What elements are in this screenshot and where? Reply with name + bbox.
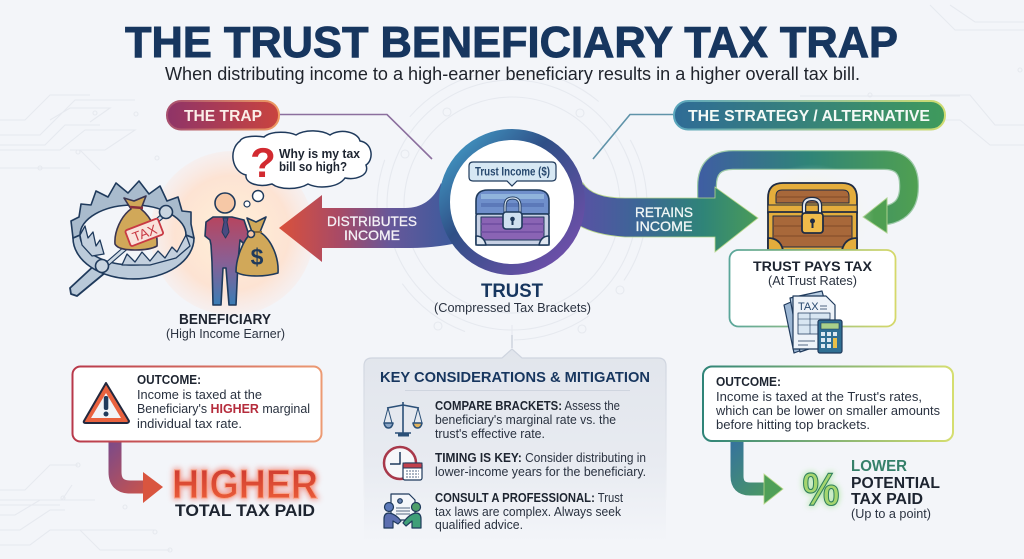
panel: left outcome: OUTCOME:: [137, 372, 201, 387]
trust pays tax box: TRUST PAYS TAX: [753, 259, 872, 274]
trust pays tax box: [730, 250, 896, 326]
lower potential tax paid: TAX PAID: [851, 491, 923, 508]
higher total tax paid: TOTAL TAX PAID: [175, 501, 315, 520]
icon: warning triangle: [84, 383, 129, 423]
pill: the strategy: [674, 101, 945, 130]
icon: bear trap with tax bag: [70, 181, 194, 296]
text: timing is key: [435, 450, 646, 479]
thought bubble: ?: [250, 139, 276, 186]
text: consult a professional: qualified advice.: [435, 517, 523, 532]
panel: key considerations: [364, 335, 666, 542]
trust label: [434, 280, 591, 315]
icon: percent sign: %: [802, 463, 840, 515]
arrow: retains income: [578, 183, 758, 252]
arrow: loop back to chest: [707, 160, 909, 233]
icon: consultation handshake: [384, 494, 421, 528]
lower potential tax paid: (Up to a point): [851, 506, 931, 521]
text: consult a professional: CONSULT A PROFESSIONAL: Trust: [435, 490, 623, 505]
arrow: distributes income: INCOME: [344, 227, 400, 243]
icon: wooden treasure chest: [768, 183, 857, 250]
arrow: distributes income: DISTRIBUTES: [327, 213, 417, 229]
text: compare brackets: COMPARE BRACKETS: Assess the: [435, 398, 620, 413]
beneficiary label: (High Income Earner): [166, 326, 285, 341]
text: consult a professional: tax laws are complex. Always seek: [435, 504, 621, 519]
higher total tax paid: HIGHER: [172, 461, 318, 507]
pill: the trap: THE TRAP: [184, 108, 262, 125]
trust label: (Compressed Tax Brackets): [434, 300, 591, 315]
subtitle: When distributing income to a high-earner beneficiary results in a higher overall tax bill.: [165, 63, 860, 84]
trust label: TRUST: [481, 280, 543, 302]
panel: right outcome: before hitting top brackets.: [716, 417, 870, 432]
trust income label: Trust Income ($): [475, 166, 550, 178]
thought bubble: bill so high?: [279, 160, 347, 174]
text: compare brackets: trust's effective rate.: [435, 426, 545, 441]
connector: strategy pill to trust: [593, 114, 673, 159]
higher total tax paid: HIGHER: [172, 461, 318, 507]
beneficiary glow: [150, 151, 314, 315]
arrow: to higher tax: [115, 442, 163, 503]
text: consult a professional: [435, 490, 623, 532]
panel: left outcome: individual tax rate.: [137, 416, 242, 431]
trust pays tax box: (At Trust Rates): [768, 274, 857, 288]
panel: right outcome: which can be lower on smaller amounts: [715, 403, 940, 418]
icon: beneficiary person with money bag: [205, 193, 278, 305]
arrow: distributes income: [279, 183, 470, 262]
lower potential tax paid: LOWER: [851, 458, 907, 475]
icon: percent sign: %: [802, 463, 840, 515]
arrow: retains income: RETAINS: [635, 204, 693, 220]
money bag: $: [251, 244, 264, 270]
panel: right outcome: OUTCOME:: [716, 374, 781, 389]
trust circle: [444, 134, 580, 270]
title: THE TRUST BENEFICIARY TAX TRAP: [125, 18, 898, 67]
panel: left outcome: Income is taxed at the: [137, 387, 262, 402]
icon: tax documents and calculator: TAX: [798, 301, 819, 313]
text: compare brackets: [435, 398, 620, 441]
pill: the trap: [167, 101, 279, 130]
pill: the strategy: THE STRATEGY / ALTERNATIVE: [688, 108, 930, 125]
lower potential tax paid: [851, 458, 940, 521]
panel: key considerations: KEY CONSIDERATIONS & MITIGATION: [380, 369, 650, 386]
icon: clock and calendar: [384, 447, 422, 480]
panel: right outcome: Income is taxed at the Trust's rates,: [716, 389, 922, 404]
icon: purple treasure chest: [476, 190, 549, 245]
text: timing is key: TIMING IS KEY: Consider distributing in: [435, 450, 646, 465]
arrow: to lower tax: [737, 441, 783, 504]
panel: right outcome: [703, 366, 953, 504]
panel: left outcome: [72, 366, 322, 503]
thought bubble: Why is my tax: [279, 147, 360, 161]
trust pays tax glow: [750, 164, 874, 268]
text: compare brackets: beneficiary's marginal rate vs. the: [435, 412, 616, 427]
panel: left outcome: Beneficiary's HIGHER marginal: [137, 401, 310, 416]
tax money bag: TAX: [130, 222, 159, 245]
lower potential tax paid: POTENTIAL: [851, 475, 940, 492]
beneficiary label: BENEFICIARY: [179, 312, 271, 328]
beneficiary label: [166, 312, 285, 341]
text: timing is key: lower-income years for the beneficiary.: [435, 464, 646, 479]
icon: tax documents and calculator: [784, 291, 842, 353]
icon: scales: [384, 402, 422, 435]
connector: trap pill to trust: [279, 114, 432, 159]
thought bubble: [233, 131, 371, 207]
arrow: retains income: INCOME: [636, 218, 692, 234]
